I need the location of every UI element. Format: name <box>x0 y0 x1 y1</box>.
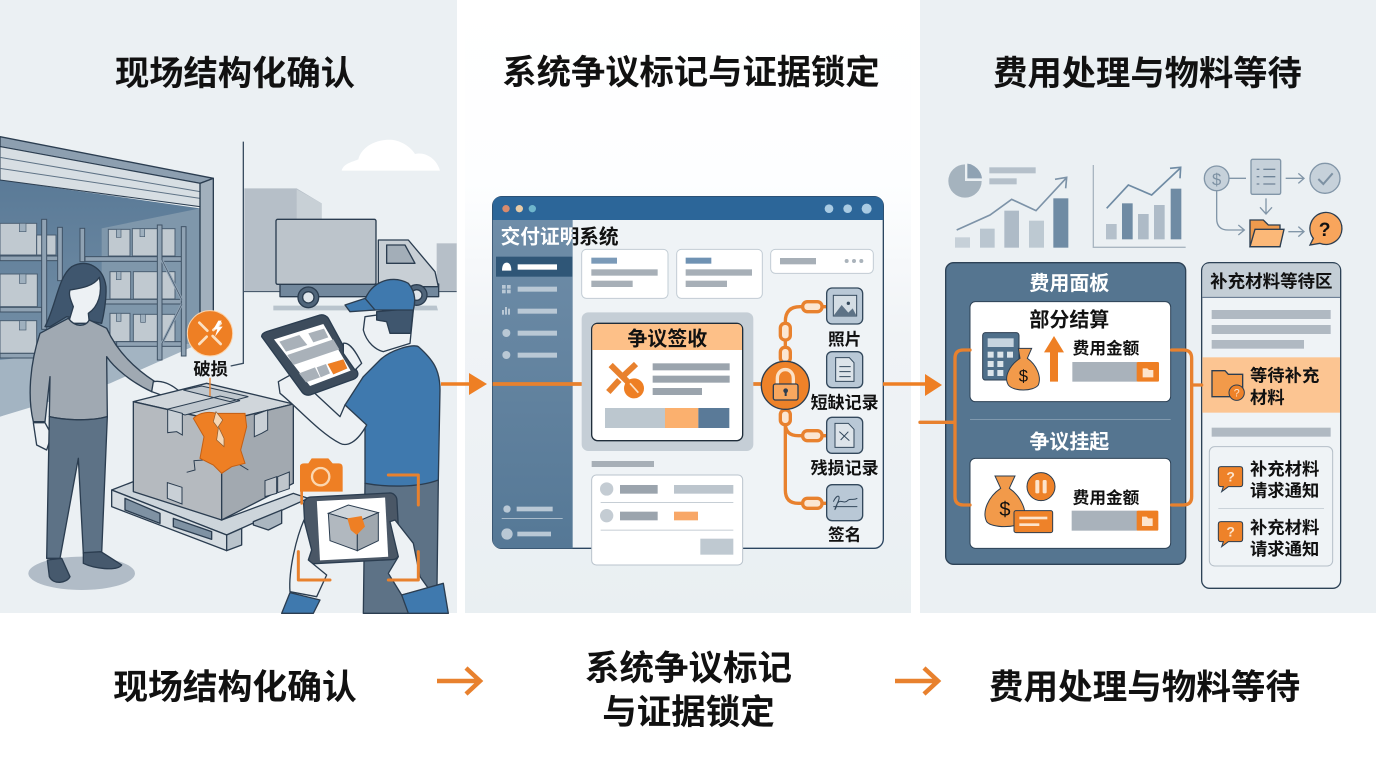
card: partial settlement <box>970 302 1171 402</box>
card: dispute hold: 费用金额 <box>1073 487 1140 507</box>
connector brackets <box>920 350 1202 505</box>
highlight: awaiting materials: ? <box>1234 388 1240 400</box>
evidence: shortage record <box>811 352 879 412</box>
icon: money bag, pause and bill <box>985 473 1055 533</box>
notice 2: 请求通知 <box>1250 539 1319 559</box>
scene: warehouse and inspection <box>0 137 457 613</box>
panel: fees and materials <box>920 0 1376 613</box>
panel: dispute system <box>465 0 911 613</box>
card: partial settlement: 部分结算 <box>1029 309 1109 332</box>
records list card <box>592 461 743 565</box>
notice 2 <box>1218 517 1319 559</box>
camera icon <box>300 458 343 503</box>
caption: on-site confirmation: 现场结构化确认 <box>113 668 357 707</box>
highlight: awaiting materials: 材料 <box>1250 387 1285 407</box>
notice 1: ? <box>1226 469 1235 485</box>
chart: pie and trend bars <box>948 164 1068 248</box>
highlight: awaiting materials <box>1202 357 1340 413</box>
caption arrow 1 <box>437 668 480 694</box>
cloud <box>342 140 440 171</box>
flow diagram: $ <box>1212 170 1221 189</box>
dispute sign-off card: 争议签收 <box>627 328 707 351</box>
amount field <box>1072 362 1159 382</box>
chart: axis bar and trend <box>1093 165 1186 247</box>
evidence: damage record <box>811 417 879 478</box>
notice 2: ? <box>1226 524 1235 540</box>
material waiting area: 补充材料等待区 <box>1210 271 1333 291</box>
panel: on-site confirmation <box>0 0 457 613</box>
truck <box>273 219 439 310</box>
heading: fee handling and material waiting: 费用处理与物料等待 <box>993 55 1302 93</box>
flow diagram <box>1204 159 1342 247</box>
amount field <box>1072 511 1158 531</box>
caption: dispute marking and evidence lock <box>585 650 792 732</box>
person: receiver <box>28 263 183 590</box>
system title: 交付证明系统 <box>501 225 619 248</box>
notice 1 <box>1218 459 1319 501</box>
heading: dispute marking and evidence lock: 系统争议标记与证据锁定 <box>502 54 880 92</box>
evidence chain <box>780 302 827 508</box>
heading: on-site confirmation: 现场结构化确认 <box>115 55 355 93</box>
handheld tablet with photo <box>282 475 448 613</box>
card: dispute hold <box>970 458 1171 548</box>
icon: calculator and money bag <box>983 333 1039 390</box>
icon: broken seal <box>608 364 644 398</box>
arrow: system to fees <box>883 374 942 396</box>
icon: money bag, pause and bill: $ <box>999 499 1011 521</box>
evidence flow line <box>493 378 767 389</box>
caption: fee handling and material waiting: 费用处理与物料等待 <box>989 669 1300 707</box>
material waiting area <box>1202 263 1341 588</box>
warehouse door with shelves <box>0 137 213 417</box>
caption arrow 2 <box>895 668 938 694</box>
evidence: photo: 照片 <box>828 330 861 349</box>
window frame and title bar <box>493 197 883 548</box>
fee panel: 费用面板 <box>1029 272 1109 295</box>
delivery proof system window <box>493 197 883 565</box>
evidence: signature: 签名 <box>828 525 861 545</box>
damaged box <box>133 383 293 520</box>
dispute sign-off card <box>582 312 753 451</box>
sidebar <box>493 220 573 548</box>
arrow: scene to system <box>441 373 487 395</box>
evidence: damage record: 残损记录 <box>811 459 879 478</box>
person: courier <box>278 279 440 613</box>
evidence: signature <box>827 485 863 545</box>
summary cards <box>582 249 873 298</box>
damage tag <box>187 311 233 396</box>
lock <box>761 361 809 409</box>
evidence: shortage record: 短缺记录 <box>811 393 879 412</box>
caption: dispute marking and evidence lock: 系统争议标记 <box>585 650 792 688</box>
icon: calculator and money bag: $ <box>1019 367 1028 386</box>
tablet: status form <box>262 315 362 395</box>
notice 1: 补充材料 <box>1250 459 1319 479</box>
fee panel <box>946 263 1186 564</box>
damage tag: 破损 <box>193 359 228 379</box>
highlight: awaiting materials: 等待补充 <box>1250 366 1319 386</box>
icon: up arrow <box>1044 336 1064 382</box>
fee panel: 争议挂起 <box>1029 430 1109 453</box>
notice 2: 补充材料 <box>1250 517 1319 537</box>
notice 1: 请求通知 <box>1250 481 1319 501</box>
evidence: photo <box>827 288 863 349</box>
notification list <box>1209 447 1333 566</box>
caption: dispute marking and evidence lock: 与证据锁定 <box>602 694 775 732</box>
card: partial settlement: 费用金额 <box>1073 338 1140 358</box>
background building <box>231 142 457 366</box>
pallet <box>112 482 308 551</box>
flow diagram: ? <box>1319 220 1331 241</box>
